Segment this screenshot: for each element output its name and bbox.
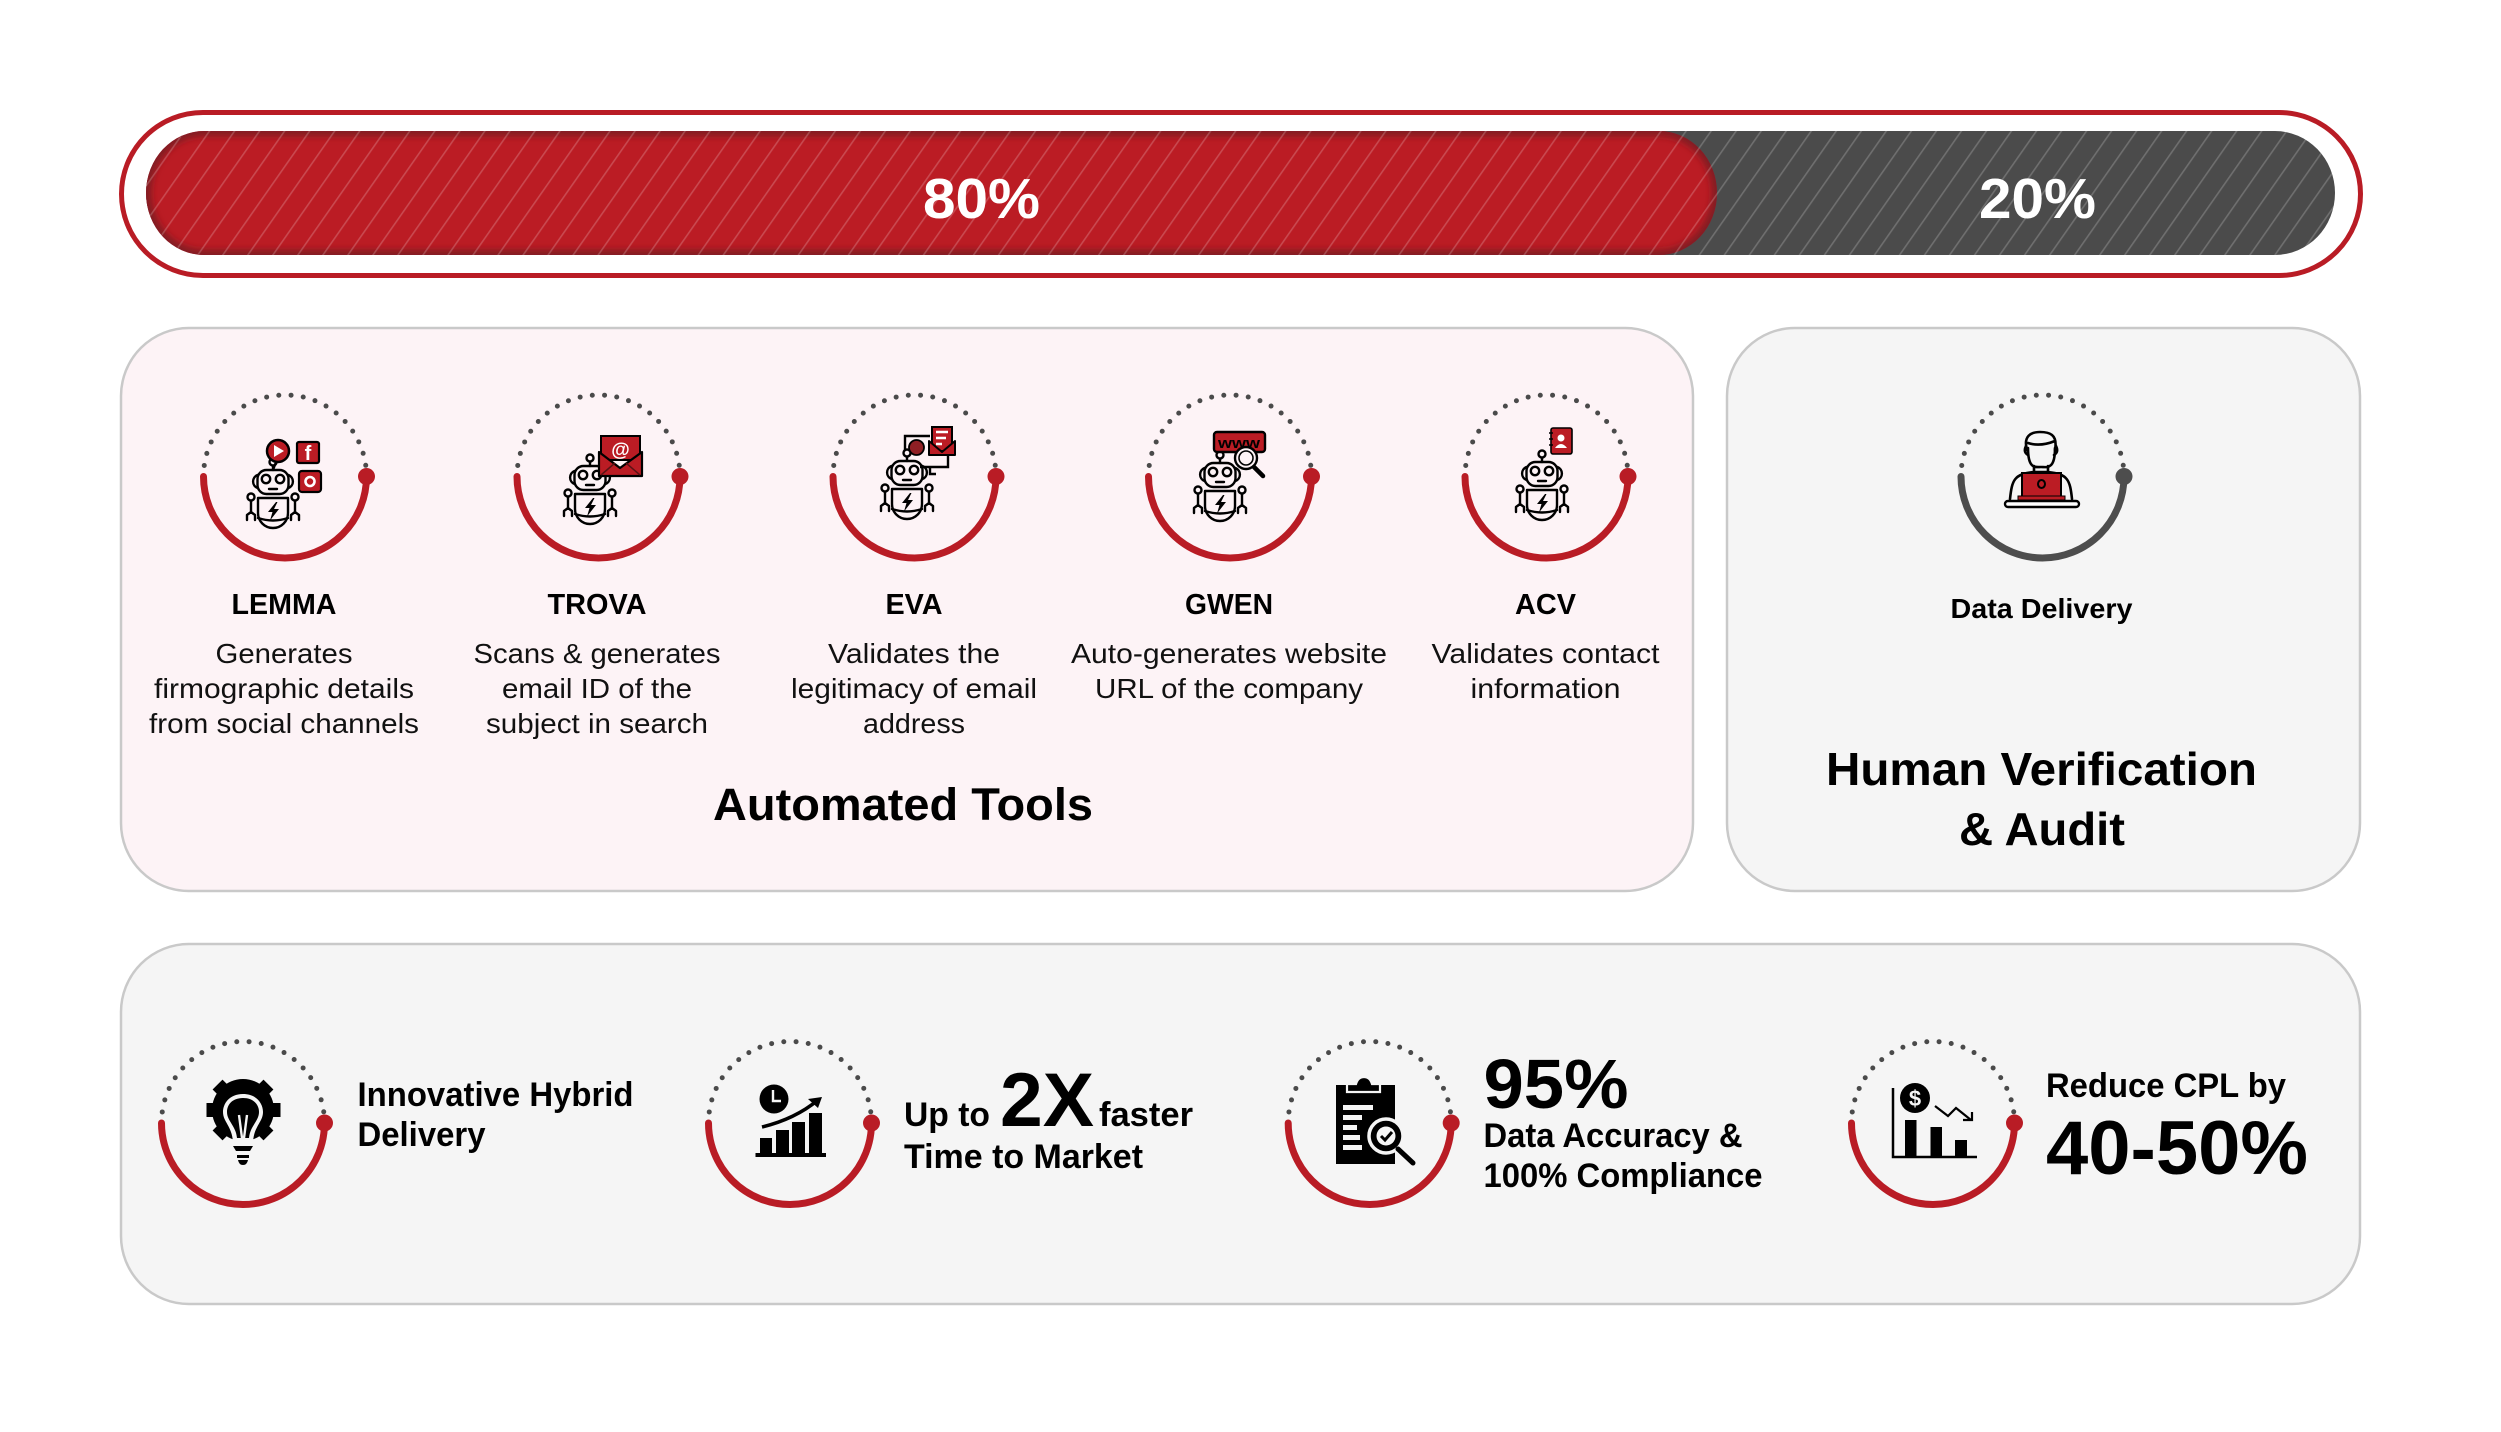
progress bar outer outline: [122, 112, 2360, 276]
description: GWEN: URL of the company: [1095, 673, 1363, 704]
icon: TROVA robot with email: @: [611, 440, 630, 461]
text: Innovative Hybrid Delivery: Innovative Hybrid: [358, 1076, 634, 1114]
grey 20% segment: [146, 131, 2335, 255]
label 20%: 20%: [1979, 167, 2096, 231]
text: Up to 2X faster Time to Market: Time to Market: [904, 1138, 1143, 1176]
description: LEMMA: firmographic details: [154, 673, 414, 704]
panel: automated tools: [121, 328, 1693, 891]
heading: Human Verification & Audit: Human Verification: [1826, 743, 2257, 795]
description: GWEN: [1071, 638, 1387, 704]
icon: dollar and falling bar chart: [1852, 1041, 2023, 1204]
description: TROVA: [474, 638, 720, 739]
text: Innovative Hybrid Delivery: [358, 1076, 634, 1154]
description: ACV: information: [1470, 673, 1620, 704]
tool: GWEN: [1071, 395, 1387, 704]
description: LEMMA: Generates: [216, 638, 352, 669]
description: EVA: [791, 638, 1037, 739]
description: ACV: [1432, 638, 1660, 704]
text: Innovative Hybrid Delivery: Delivery: [358, 1116, 486, 1154]
icon: EVA robot with monitor and envelope: [833, 395, 1004, 558]
description: GWEN: Auto-generates website: [1071, 638, 1387, 669]
description: TROVA: subject in search: [486, 708, 708, 739]
text: Up to 2X faster Time to Market: faster: [1099, 1096, 1193, 1134]
text: Up to 2X faster Time to Market: [904, 1058, 1193, 1176]
description: EVA: Validates the: [828, 638, 1000, 669]
icon: LEMMA robot with social media: [204, 395, 375, 558]
text: 95% Data Accuracy & 100% Compliance: [1484, 1045, 1762, 1195]
name: TROVA: TROVA: [548, 589, 647, 621]
icon: GWEN robot with www search: www: [1217, 435, 1260, 452]
name: LEMMA: LEMMA: [232, 589, 337, 621]
benefit: data accuracy and compliance: [1288, 1041, 1762, 1204]
description: ACV: Validates contact: [1432, 638, 1660, 669]
icon: clock and growth chart: [708, 1041, 880, 1204]
description: LEMMA: [149, 638, 419, 739]
tool: ACV: [1432, 395, 1660, 704]
benefit: innovative hybrid delivery: [162, 1041, 634, 1204]
red 80% segment: [146, 131, 1717, 255]
description: TROVA: email ID of the: [502, 673, 692, 704]
heading: Human Verification & Audit: [1826, 743, 2257, 855]
tool: TROVA: [474, 395, 720, 739]
text: Reduce CPL by 40-50%: Reduce CPL by: [2046, 1067, 2286, 1105]
description: TROVA: Scans & generates: [474, 638, 720, 669]
text: 95% Data Accuracy & 100% Compliance: Data Accuracy &: [1484, 1117, 1742, 1155]
heading: Human Verification & Audit: & Audit: [1959, 803, 2125, 855]
panel: human verification and audit: [1727, 328, 2360, 891]
tool: EVA: [791, 395, 1037, 739]
icon: clipboard with magnifier: [1288, 1041, 1460, 1204]
panel: benefits: [121, 944, 2360, 1304]
diagonal stripes overlay: [146, 131, 2335, 255]
label 80%: 80%: [923, 167, 1040, 231]
benefit: reduce CPL: [1852, 1041, 2308, 1204]
name: ACV: ACV: [1515, 589, 1577, 621]
text: Reduce CPL by 40-50%: [2046, 1067, 2308, 1191]
icon: person at laptop: [1961, 395, 2132, 558]
icon: gear with light bulb: [162, 1041, 333, 1204]
heading: Automated Tools: Automated Tools: [713, 779, 1093, 830]
description: LEMMA: from social channels: [149, 708, 419, 739]
label: Data Delivery: Data Delivery: [1950, 593, 2133, 624]
benefit: faster time to market: [708, 1041, 1193, 1204]
text: 95% Data Accuracy & 100% Compliance: 100% Compliance: [1484, 1157, 1762, 1195]
icon: dollar and falling bar chart: $: [1909, 1086, 1921, 1111]
icon: GWEN robot with www search: [1148, 395, 1320, 558]
progress bar: 80% automated, 20% human: [122, 112, 2360, 276]
text: Up to 2X faster Time to Market: Up to: [904, 1096, 990, 1134]
text: 95% Data Accuracy & 100% Compliance: 95%: [1484, 1045, 1628, 1123]
description: EVA: legitimacy of email: [791, 673, 1037, 704]
icon: TROVA robot with email: [517, 395, 688, 558]
icon: ACV robot with contact book: [1465, 395, 1636, 558]
text: Reduce CPL by 40-50%: 40-50%: [2046, 1106, 2308, 1191]
name: EVA: EVA: [886, 589, 943, 621]
icon: LEMMA robot with social media: f: [305, 443, 312, 465]
tool: LEMMA: [149, 395, 419, 739]
text: Up to 2X faster Time to Market: 2X: [1000, 1058, 1094, 1143]
name: GWEN: GWEN: [1185, 589, 1273, 621]
description: EVA: address: [863, 708, 965, 739]
